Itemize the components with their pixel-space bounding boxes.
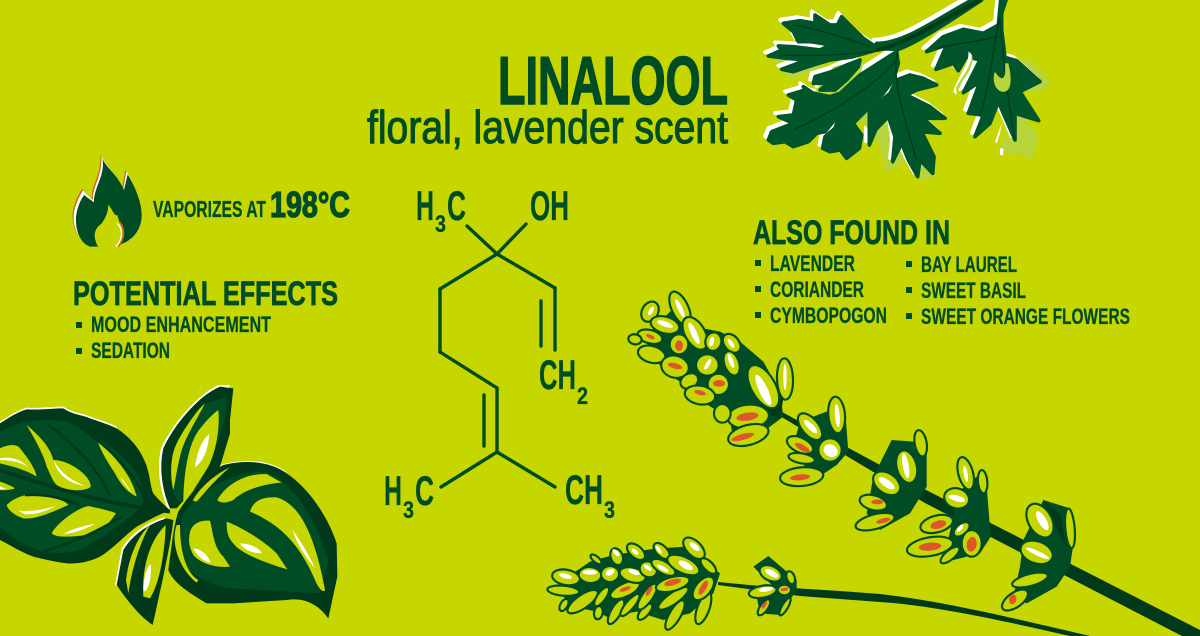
chart: linalool molecular structure: C (415, 467, 434, 514)
chart: linalool molecular structure: 3 (435, 211, 446, 238)
heading: potential effects: POTENTIAL EFFECTS (73, 275, 338, 313)
illustration: lavender sprig, right (628, 288, 1200, 636)
chart: linalool molecular structure: CH (539, 351, 576, 398)
chart: linalool molecular structure: 3 (403, 497, 414, 524)
chart: linalool molecular structure: H (416, 182, 434, 229)
chart: linalool molecular structure: C (447, 182, 466, 229)
list: plants column one: CYMBOPOGON (770, 303, 887, 328)
list: plants column one (755, 251, 887, 328)
leaf: large left (0, 408, 170, 564)
list: plants column two: SWEET BASIL (921, 278, 1026, 303)
icon: flame (73, 154, 142, 247)
illustration: coriander sprig (765, 0, 1052, 180)
chart: linalool molecular structure: 3 (604, 497, 615, 524)
leaf: top (161, 387, 233, 508)
title: floral, lavender scent (367, 101, 728, 153)
flower cluster one and two (628, 288, 848, 488)
heading: also found in: ALSO FOUND IN (753, 214, 950, 252)
list: effects: SEDATION (91, 338, 170, 363)
list: plants column one: LAVENDER (770, 251, 855, 276)
stem (780, 412, 1200, 636)
leaf: right (168, 462, 337, 618)
title: LINALOOL (498, 43, 728, 119)
list: plants column one: CORIANDER (770, 277, 864, 302)
illustration: lavender sprig, bottom (547, 534, 1090, 636)
illustration: basil leaves (0, 385, 337, 625)
list: plants column two (906, 252, 1130, 329)
text: vaporizes at 198°C (153, 184, 350, 225)
panel: also found in (753, 214, 1130, 329)
flower cluster three, four and five (854, 429, 1076, 615)
stem (718, 582, 1090, 636)
list: effects: MOOD ENHANCEMENT (91, 312, 271, 337)
list: plants column two: BAY LAUREL (921, 252, 1017, 277)
title (367, 43, 728, 153)
chart: linalool molecular structure (384, 182, 615, 524)
list: effects (76, 312, 271, 363)
text: vaporizes at 198°C: VAPORIZES AT (153, 196, 266, 222)
vaporization callout (73, 154, 350, 247)
leaf: small bottom (117, 518, 173, 625)
chart: linalool molecular structure: 2 (577, 383, 588, 410)
chart: linalool molecular structure: OH (530, 182, 569, 229)
chart: linalool molecular structure: H (384, 467, 402, 514)
text: vaporizes at 198°C: 198°C (270, 184, 350, 225)
chart: linalool molecular structure: CH (565, 466, 603, 513)
white edges (0, 385, 287, 588)
panel: potential effects (73, 275, 338, 363)
flower clusters (547, 534, 797, 632)
